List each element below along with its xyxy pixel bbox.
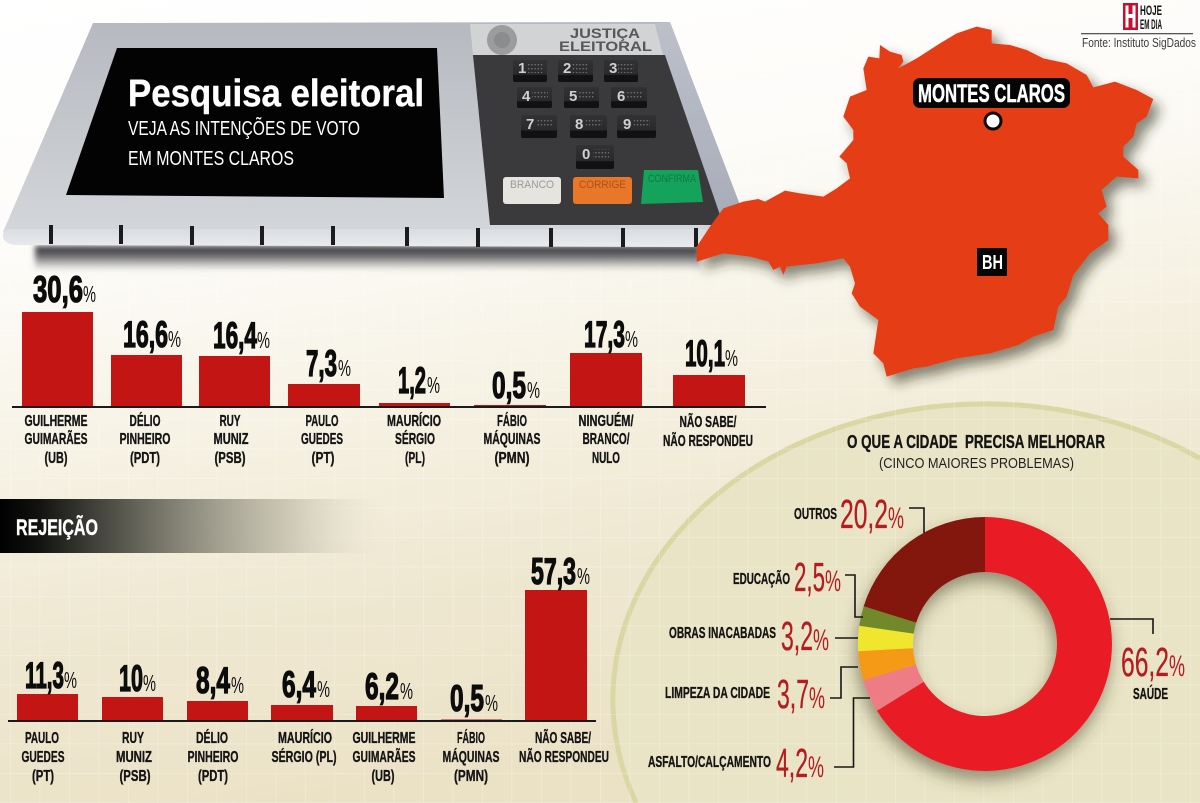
labels: DÉLIO: [196, 730, 228, 747]
labels: (PMN): [494, 450, 530, 467]
bars: [17, 590, 587, 721]
machine right bevel: [655, 22, 740, 226]
values: 1,2: [398, 360, 426, 401]
values: 8,4: [196, 660, 230, 701]
Justiça Eleitoral plate: JUSTIÇA: [570, 26, 640, 41]
labels: GUEDES: [301, 431, 343, 448]
callout: limpeza da cidade: [665, 667, 858, 717]
machine front strip: [3, 229, 720, 247]
title on screen: VEJA AS INTENÇÕES DE VOTO: [128, 116, 360, 140]
values: [25, 551, 590, 719]
city label: Montes Claros: MONTES CLAROS: [918, 80, 1065, 108]
labels: (UB): [372, 768, 394, 785]
labels: (PT): [32, 768, 54, 785]
values: %: [485, 690, 498, 716]
keypad: 8: [575, 116, 583, 133]
labels: MUNIZ: [116, 749, 152, 766]
labels: (PT): [312, 450, 334, 467]
city marker: [985, 113, 1001, 129]
labels: GUIMARÃES: [352, 748, 416, 766]
values: %: [257, 327, 270, 353]
heading: city problems: (CINCO MAIORES PROBLEMAS): [879, 455, 1074, 472]
callout: outros: %: [888, 502, 904, 535]
labels: (PDT): [198, 768, 228, 785]
logo: Hoje em Dia: HOJE: [1140, 2, 1162, 18]
values: %: [400, 678, 413, 704]
callout: obras inacabadas: [669, 613, 858, 659]
values: %: [625, 326, 638, 352]
keypad: 0: [582, 146, 590, 163]
labels: (UB): [44, 450, 68, 467]
slice: obras: [858, 626, 914, 651]
title on screen: EM MONTES CLAROS: [128, 148, 294, 170]
heading: city problems: O QUE A CIDADE PRECISA MELHORAR: [847, 432, 1105, 452]
machine body: [3, 22, 740, 232]
labels: (PMN): [454, 768, 488, 785]
values: %: [527, 377, 540, 403]
title on screen: [128, 73, 424, 170]
callout: saúde: SAÚDE: [1133, 685, 1168, 703]
slice: outros: [864, 517, 985, 623]
labels: PAULO: [306, 413, 338, 430]
values: %: [143, 670, 156, 696]
labels: NÃO RESPONDEU: [519, 748, 609, 766]
bar chart: rejection: [8, 551, 609, 785]
callout: outros: OUTROS: [794, 506, 837, 523]
values: 10: [119, 658, 143, 699]
labels: GUIMARÃES: [24, 430, 88, 448]
values: 16,6: [123, 314, 168, 355]
labels: MUNIZ: [214, 431, 249, 448]
values: 0,5: [492, 365, 526, 406]
heading: rejeição band: [0, 499, 392, 553]
labels: MÁQUINAS: [442, 749, 500, 766]
button: branco: BRANCO: [510, 179, 554, 191]
city label: BH: [977, 248, 1007, 276]
values: %: [427, 372, 440, 398]
donut chart: [858, 517, 1112, 771]
callout: saúde: %: [1169, 650, 1185, 683]
labels: DÉLIO: [130, 413, 160, 430]
button: branco: [503, 177, 561, 204]
labels: PINHEIRO: [120, 431, 170, 448]
labels: MÁQUINAS: [484, 431, 540, 448]
callout: outros: [794, 491, 924, 537]
callout: educação: [733, 554, 863, 617]
keypad: [473, 55, 720, 225]
values: 57,3: [531, 551, 576, 592]
labels: (PDT): [130, 450, 160, 467]
callout: limpeza da cidade: 3,7: [777, 671, 809, 717]
callout: obras inacabadas: 3,2: [781, 613, 813, 659]
keypad: 7: [526, 116, 534, 133]
city label: Montes Claros: [913, 78, 1070, 108]
bar chart: voting intentions: [12, 269, 766, 467]
heading: city problems: [847, 432, 1105, 472]
labels: NÃO SABE/: [680, 413, 737, 431]
button: corrige: CORRIGE: [579, 179, 626, 191]
callout: saúde: [1110, 619, 1185, 703]
values: %: [577, 563, 590, 589]
callout: limpeza da cidade: %: [809, 682, 825, 715]
values: 6,2: [365, 666, 399, 707]
values: %: [317, 676, 330, 702]
slice: educação: [859, 606, 916, 634]
labels: MAURÍCIO: [387, 413, 441, 430]
labels: (PSB): [214, 450, 246, 467]
callout: asfalto/calçamento: [648, 698, 870, 786]
voting machine illustration: [3, 22, 740, 271]
values: %: [338, 355, 351, 381]
values: %: [64, 667, 77, 693]
values: 16,4: [213, 315, 257, 356]
keypad: 4: [522, 88, 531, 105]
keypad: 6: [617, 88, 625, 105]
labels: (PL): [405, 450, 425, 467]
values: %: [725, 345, 738, 371]
labels: PAULO: [25, 730, 59, 747]
values: %: [168, 326, 181, 352]
labels: PINHEIRO: [188, 749, 238, 766]
callout: educação: EDUCAÇÃO: [733, 570, 790, 588]
keypad: 1: [518, 60, 526, 77]
labels: SÉRGIO (PL): [272, 749, 336, 766]
Justiça Eleitoral plate: [470, 24, 663, 55]
labels: FÁBIO: [457, 730, 485, 747]
labels: FÁBIO: [497, 413, 527, 430]
title on screen: Pesquisa eleitoral: [128, 73, 424, 115]
callout: educação: %: [825, 565, 841, 598]
Justiça Eleitoral plate: ELEITORAL: [559, 39, 652, 54]
keypad: 5: [569, 88, 577, 105]
values: 7,3: [306, 343, 337, 384]
labels: [22, 729, 609, 785]
keypad: 3: [609, 60, 617, 77]
labels: (PSB): [120, 768, 150, 785]
keypad: 9: [623, 116, 631, 133]
logo: Hoje em Dia: [1123, 2, 1162, 32]
machine shadow: [35, 246, 700, 271]
callout: asfalto/calçamento: 4,2: [776, 740, 808, 786]
labels: RUY: [122, 730, 144, 747]
slice: saúde: [877, 517, 1112, 771]
labels: SÉRGIO: [395, 431, 435, 448]
callout: saúde: 66,2: [1121, 639, 1169, 685]
slice: asfalto: [863, 664, 924, 711]
button: corrige: [573, 177, 632, 204]
labels: RUY: [220, 413, 241, 430]
values: 30,6: [33, 269, 83, 310]
callout: outros: 20,2: [840, 491, 888, 537]
values: 17,3: [584, 314, 625, 355]
labels: GUILHERME: [24, 413, 88, 430]
text: EM DIA: [1140, 16, 1162, 32]
values: %: [83, 281, 96, 307]
values: 0,5: [450, 678, 484, 719]
city label: BH: BH: [982, 252, 1003, 274]
strip notches: [49, 225, 698, 247]
values: [33, 269, 738, 406]
labels: BRANCO/: [582, 431, 630, 448]
button: confirma: CONFIRMA: [648, 173, 697, 185]
callout: obras inacabadas: OBRAS INACABADAS: [669, 625, 776, 642]
slice: limpeza: [858, 648, 916, 680]
labels: MAURÍCIO: [278, 730, 332, 747]
screen: [66, 48, 444, 198]
heading: rejeição band: REJEIÇÃO: [16, 515, 98, 540]
map of Minas Gerais: [697, 27, 1153, 377]
labels: NINGUÉM/: [578, 413, 634, 430]
values: 6,4: [282, 664, 316, 705]
bars: [22, 312, 745, 407]
callout: limpeza da cidade: LIMPEZA DA CIDADE: [665, 685, 770, 702]
values: 11,3: [25, 655, 64, 696]
labels: NÃO RESPONDEU: [663, 432, 753, 450]
callout: obras inacabadas: %: [813, 624, 829, 657]
callout: asfalto/calçamento: ASFALTO/CALÇAMENTO: [648, 754, 771, 771]
button: confirma: [641, 170, 703, 204]
labels: GUEDES: [22, 749, 64, 766]
labels: NÃO SABE/: [535, 729, 591, 747]
panel: city problems backdrop circle: [613, 404, 1200, 803]
labels: [24, 413, 753, 467]
labels: GUILHERME: [352, 730, 416, 747]
values: %: [231, 672, 244, 698]
labels: NULO: [592, 450, 620, 467]
callout: educação: 2,5: [794, 554, 825, 600]
callout: asfalto/calçamento: %: [808, 751, 824, 784]
values: 10,1: [685, 333, 725, 374]
keypad: 2: [563, 60, 571, 77]
